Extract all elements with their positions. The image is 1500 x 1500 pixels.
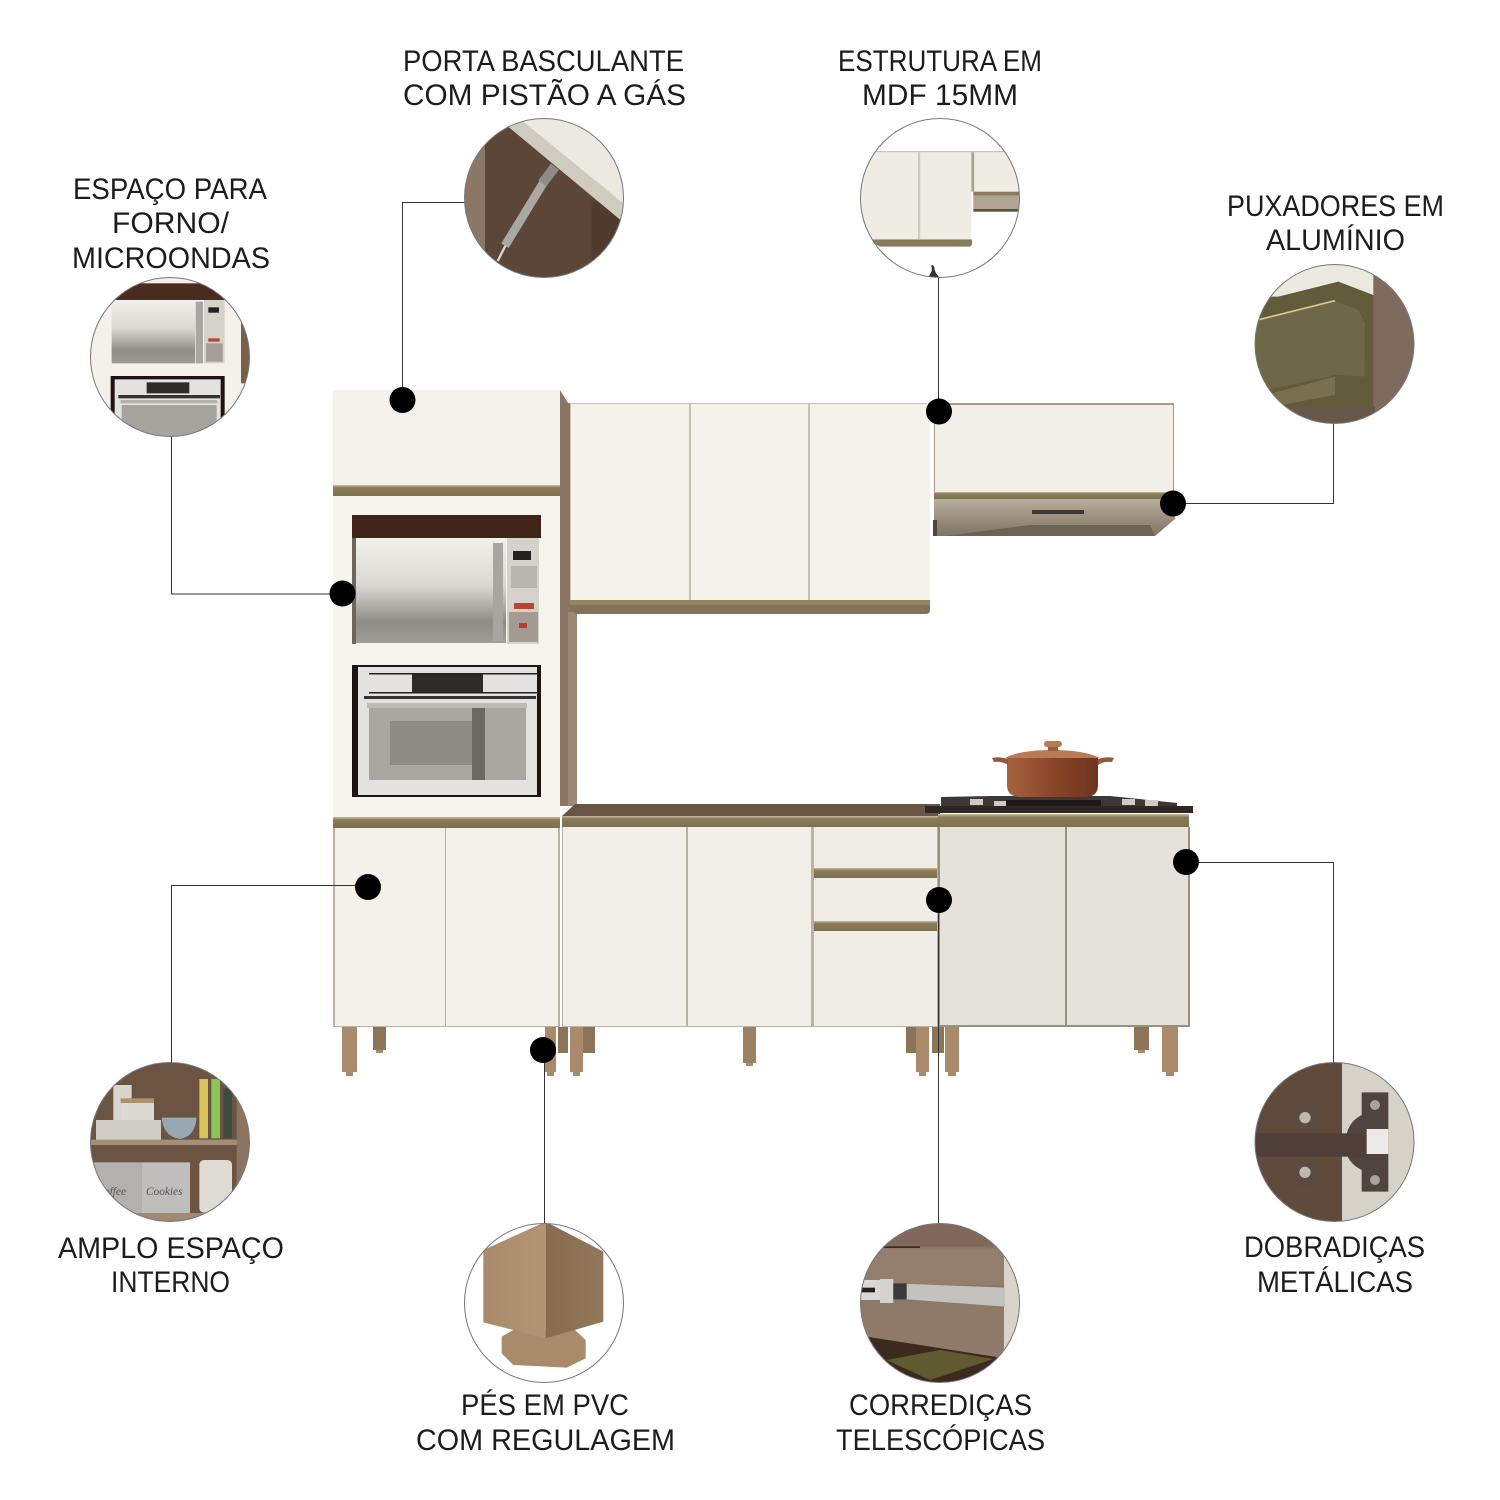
label: pes em pvc com regulagem: COM REGULAGEM	[416, 1424, 675, 1457]
callout circle: forno e microondas	[90, 277, 251, 446]
base cabinet right	[938, 827, 1190, 1027]
callout circle: amplo espaco interno: Cookies	[146, 1186, 183, 1198]
label: porta basculante com pistao a gas: PORTA BASCULANTE	[403, 45, 684, 78]
label: puxadores em aluminio: PUXADORES EM	[1227, 190, 1444, 223]
label: dobradicas metalicas: METÁLICAS	[1257, 1266, 1413, 1299]
callout circle: pistao a gas	[462, 117, 625, 278]
connector: amplo	[172, 886, 368, 1063]
label: dobradicas metalicas	[1244, 1231, 1425, 1299]
label: porta basculante com pistao a gas	[403, 45, 686, 112]
base cabinet left	[333, 828, 560, 1027]
cooktop	[925, 796, 1193, 813]
label: espaco para forno/microondas	[72, 173, 270, 275]
label: estrutura em mdf 15mm: MDF 15MM	[862, 79, 1018, 112]
callout circle: amplo espaco interno: offee	[104, 1186, 126, 1198]
upper right cabinet	[934, 403, 1174, 499]
cooking pot	[992, 741, 1114, 797]
callout circle: puxadores	[1252, 260, 1417, 430]
tower body	[333, 496, 560, 817]
tower brass strip	[333, 485, 560, 496]
tower top door	[333, 390, 560, 485]
label: amplo espaco interno	[58, 1232, 284, 1299]
label: amplo espaco interno: AMPLO ESPAÇO	[58, 1232, 284, 1265]
marker dots	[330, 387, 1199, 1063]
connector: pes	[544, 1050, 546, 1224]
cabinet feet	[342, 1027, 1178, 1076]
callout circle: corredicas	[857, 1222, 1024, 1388]
label: pes em pvc com regulagem: PÉS EM PVC	[461, 1389, 629, 1422]
callout circle: estrutura mdf	[857, 118, 1022, 278]
connector: porta	[402, 202, 465, 400]
label: porta basculante com pistao a gas: COM PISTÃO A GÁS	[403, 78, 686, 112]
callout circle: pes em pvc	[464, 1222, 624, 1383]
label: amplo espaco interno: INTERNO	[111, 1266, 230, 1299]
label: corredicas telescopicas: CORREDIÇAS	[849, 1389, 1032, 1422]
callout circle: amplo espaco interno	[90, 1062, 250, 1226]
connector: dobradicas	[1186, 862, 1334, 1063]
callout circle: dobradicas	[1255, 1062, 1422, 1222]
label: espaco para forno/microondas: MICROONDAS	[72, 242, 270, 275]
wall cabinet doors	[570, 403, 930, 614]
label: corredicas telescopicas: TELESCÓPICAS	[836, 1424, 1045, 1457]
connector: puxadores	[1173, 423, 1334, 504]
label: espaco para forno/microondas: FORNO/	[112, 207, 230, 240]
label: espaco para forno/microondas: ESPAÇO PARA	[73, 173, 267, 206]
lower cabinet strips and worktop	[333, 804, 1189, 828]
connector: estrutura	[938, 278, 940, 411]
label: estrutura em mdf 15mm	[838, 45, 1042, 112]
microwave in niche	[352, 515, 541, 644]
label: puxadores em aluminio	[1227, 190, 1444, 257]
connector: forno	[172, 436, 342, 594]
label: estrutura em mdf 15mm: ESTRUTURA EM	[838, 45, 1042, 78]
label: corredicas telescopicas	[836, 1389, 1045, 1457]
label: dobradicas metalicas: DOBRADIÇAS	[1244, 1231, 1425, 1264]
tower side panel	[560, 390, 577, 806]
connector: corredicas	[938, 900, 940, 1224]
cooker hood	[933, 499, 1175, 536]
kitchen illustration	[333, 390, 1193, 1076]
built-in oven	[352, 665, 541, 797]
label: pes em pvc com regulagem	[416, 1389, 675, 1457]
base cabinet middle	[562, 827, 938, 1027]
label: puxadores em aluminio: ALUMÍNIO	[1266, 224, 1405, 257]
